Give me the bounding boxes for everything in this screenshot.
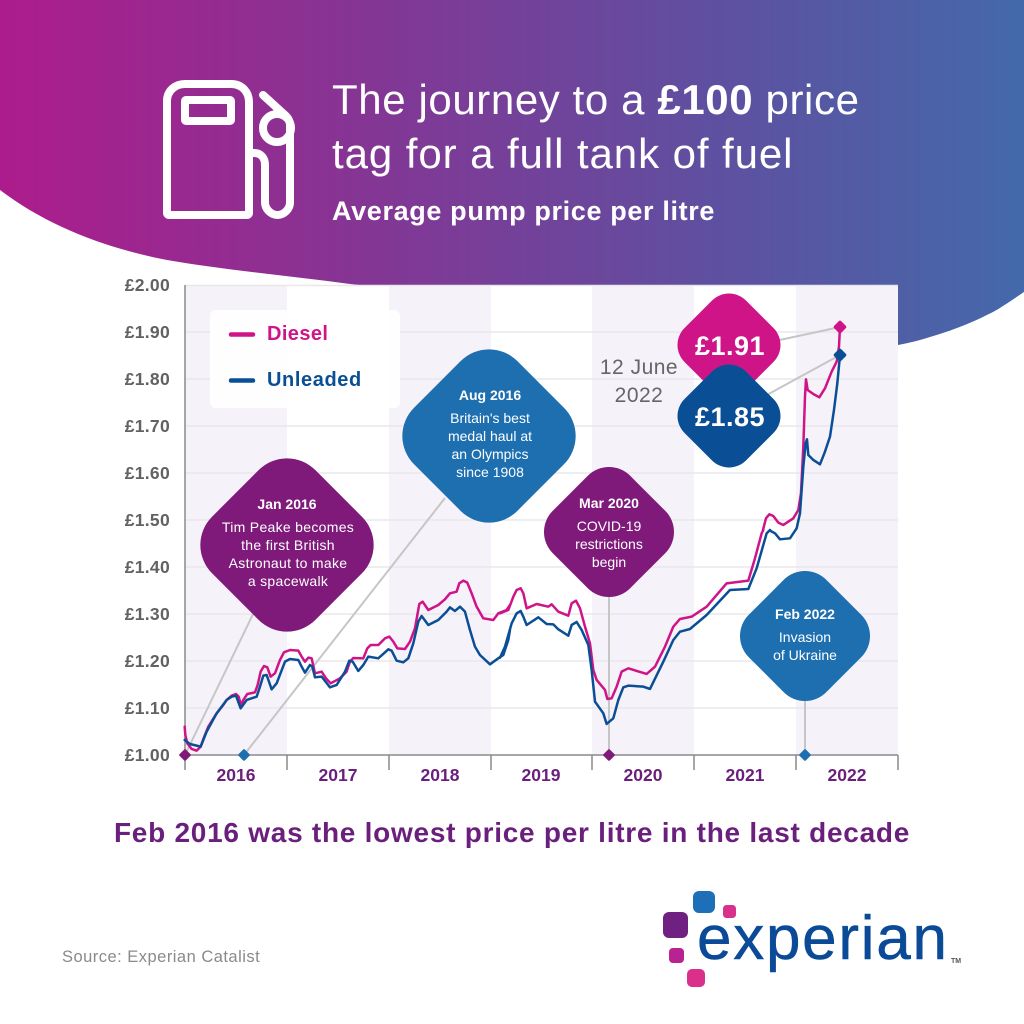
legend: Unleaded <box>267 369 362 391</box>
x axis year labels: 2021 <box>726 765 765 785</box>
callout: Mar 2020: restrictions <box>575 536 643 552</box>
subtitle: Average pump price per litre <box>332 196 715 226</box>
end marker: diesel <box>833 320 847 334</box>
callout: diesel price: £1.91 <box>695 331 765 361</box>
callout: Jan 2016: a spacewalk <box>248 573 329 589</box>
legend <box>210 310 400 408</box>
y axis labels: £2.00 <box>125 275 170 295</box>
x axis year labels: 2018 <box>421 765 460 785</box>
y axis labels: £1.50 <box>125 510 170 530</box>
x axis year labels <box>217 765 867 785</box>
y axis labels: £1.60 <box>125 463 170 483</box>
callout: unleaded price: £1.85 <box>695 402 765 432</box>
chart <box>125 275 898 785</box>
callout: Feb 2022: of Ukraine <box>773 647 837 663</box>
callout: Aug 2016: Britain's best <box>450 410 530 426</box>
chart plot background <box>185 285 898 755</box>
y axis labels: £1.00 <box>125 745 170 765</box>
callout: diesel price <box>668 284 790 406</box>
title: tag for a full tank of fuel <box>332 130 793 177</box>
callout: Feb 2022: Feb 2022 <box>775 606 835 622</box>
callout leader lines <box>185 327 840 755</box>
callout: unleaded price <box>668 355 790 477</box>
callout: Mar 2020 <box>532 455 686 609</box>
y axis labels <box>125 275 170 765</box>
date label: 12 June <box>600 356 678 379</box>
x axis year labels: 2022 <box>828 765 867 785</box>
source note: Source: Experian Catalist <box>62 948 260 966</box>
experian logo: experian <box>697 904 947 973</box>
unleaded price line <box>185 355 840 747</box>
x axis year labels: 2020 <box>624 765 663 785</box>
y axis labels: £1.70 <box>125 416 170 436</box>
callout: Aug 2016: medal haul at <box>448 428 532 444</box>
callout: Jan 2016: Astronaut to make <box>229 555 347 571</box>
y axis labels: £1.20 <box>125 651 170 671</box>
callout: Mar 2020: Mar 2020 <box>579 495 639 511</box>
callout: Mar 2020: COVID-19 <box>577 518 641 534</box>
callout: Aug 2016: since 1908 <box>456 464 524 480</box>
end marker: unleaded <box>833 348 847 362</box>
callout: Aug 2016: Aug 2016 <box>459 387 521 403</box>
callout: Mar 2020: begin <box>592 554 626 570</box>
year shading bands <box>185 285 898 755</box>
y axis labels: £1.40 <box>125 557 170 577</box>
callout: Feb 2022: Invasion <box>779 629 831 645</box>
header wave background <box>0 0 1024 345</box>
x axis year labels: 2017 <box>319 765 357 785</box>
callout: Jan 2016: Tim Peake becomes <box>222 519 354 535</box>
legend: Diesel <box>267 323 328 345</box>
title: The journey to a £100 price <box>332 76 860 123</box>
y axis labels: £1.10 <box>125 698 170 718</box>
callout: Aug 2016 <box>386 333 592 539</box>
callout: Jan 2016: Jan 2016 <box>257 496 317 512</box>
x axis year labels: 2019 <box>522 765 561 785</box>
icon: fuel pump <box>167 84 291 215</box>
x axis year labels: 2016 <box>217 765 256 785</box>
axes <box>185 285 898 770</box>
y axis labels: £1.30 <box>125 604 170 624</box>
diesel price line <box>185 327 840 751</box>
y axis labels: £1.80 <box>125 369 170 389</box>
footer headline: Feb 2016 was the lowest price per litre in the last decade <box>114 817 910 848</box>
y axis labels: £1.90 <box>125 322 170 342</box>
experian logo: TM <box>951 958 961 965</box>
timeline markers <box>179 749 811 761</box>
date label: 2022 <box>615 384 663 407</box>
callout: Jan 2016 <box>184 442 390 648</box>
callout: Aug 2016: an Olympics <box>451 446 529 462</box>
callout: Jan 2016: the first British <box>241 537 335 553</box>
callout: Feb 2022 <box>728 559 882 713</box>
experian logo <box>663 891 961 987</box>
